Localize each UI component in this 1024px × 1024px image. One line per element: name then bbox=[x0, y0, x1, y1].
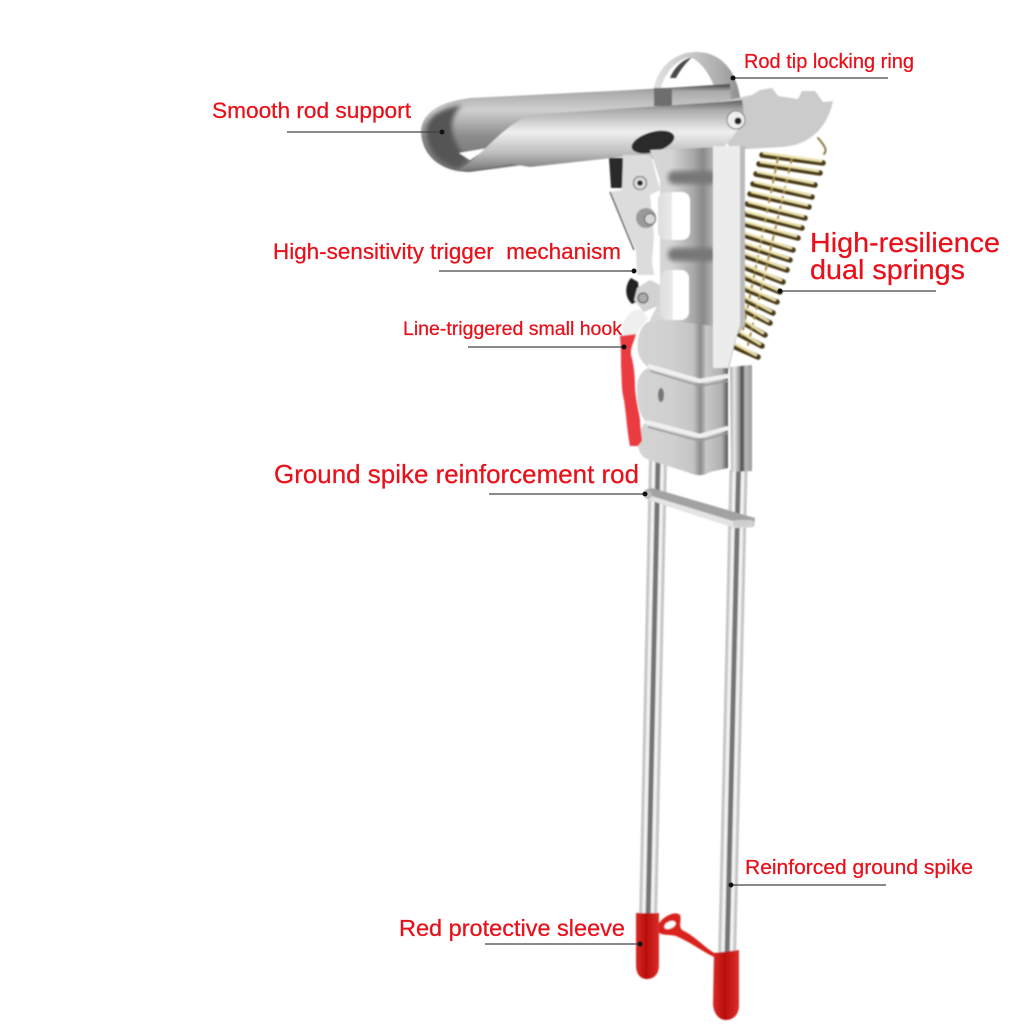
label: rod tip locking ring: Rod tip locking ring bbox=[744, 51, 914, 73]
strap loop hole bbox=[663, 919, 677, 931]
lower ridge bbox=[668, 248, 716, 261]
front tip bbox=[715, 88, 833, 150]
lower bracket body bbox=[637, 320, 728, 475]
label: line-triggered small hook bbox=[403, 319, 626, 350]
red trigger grip bbox=[620, 334, 642, 446]
label: red protective sleeve: Red protective sleeve bbox=[399, 915, 625, 941]
trough slot bbox=[629, 126, 677, 158]
label: reinforced ground spike: Reinforced ground spike bbox=[745, 857, 973, 879]
rear rod support tube bbox=[421, 84, 732, 172]
front rod support trough bbox=[456, 100, 745, 171]
strap bbox=[658, 913, 716, 957]
label: high-resilience dual springs bbox=[778, 227, 1000, 294]
left red sleeve bbox=[636, 913, 659, 979]
lower window bbox=[660, 270, 689, 320]
crossbar bbox=[644, 488, 755, 528]
label: high-sensitivity trigger mechanism: High-sensitivity trigger mechanism bbox=[273, 239, 621, 264]
upper window bbox=[658, 192, 690, 240]
label: rod tip locking ring bbox=[730, 51, 914, 80]
left ground spike rod bbox=[648, 460, 658, 920]
bright side column bbox=[713, 146, 740, 368]
right red sleeve bbox=[713, 950, 739, 1020]
pivot bolt bbox=[727, 111, 745, 129]
locking ring bbox=[653, 52, 741, 106]
product: rod holder bbox=[421, 52, 833, 1020]
right ground spike rod bbox=[727, 470, 738, 960]
label: line-triggered small hook: Line-triggered small hook bbox=[403, 319, 623, 340]
tube inner shadow bbox=[426, 105, 468, 168]
gap highlight bbox=[459, 148, 488, 160]
spike sleeve tube bbox=[730, 365, 752, 472]
trigger mechanism bbox=[609, 155, 660, 336]
body ridges bbox=[646, 366, 728, 436]
double spring bbox=[733, 138, 826, 357]
ring clamp bbox=[654, 88, 672, 106]
label: high-resilience dual springs: High-resilience bbox=[810, 227, 1000, 258]
label: reinforced ground spike bbox=[728, 857, 973, 888]
label: ground spike reinforcement rod: Ground spike reinforcement rod bbox=[274, 459, 639, 489]
body rivet hole bbox=[658, 388, 664, 402]
label: high-resilience dual springs: dual springs bbox=[810, 254, 965, 285]
ring inner shadow bbox=[670, 57, 692, 78]
upper ridge bbox=[668, 171, 716, 184]
main bracket upper body bbox=[640, 146, 745, 372]
label: high-sensitivity trigger mechanism bbox=[273, 239, 636, 274]
label: smooth rod support bbox=[212, 98, 444, 134]
label: smooth rod support: Smooth rod support bbox=[212, 98, 411, 123]
